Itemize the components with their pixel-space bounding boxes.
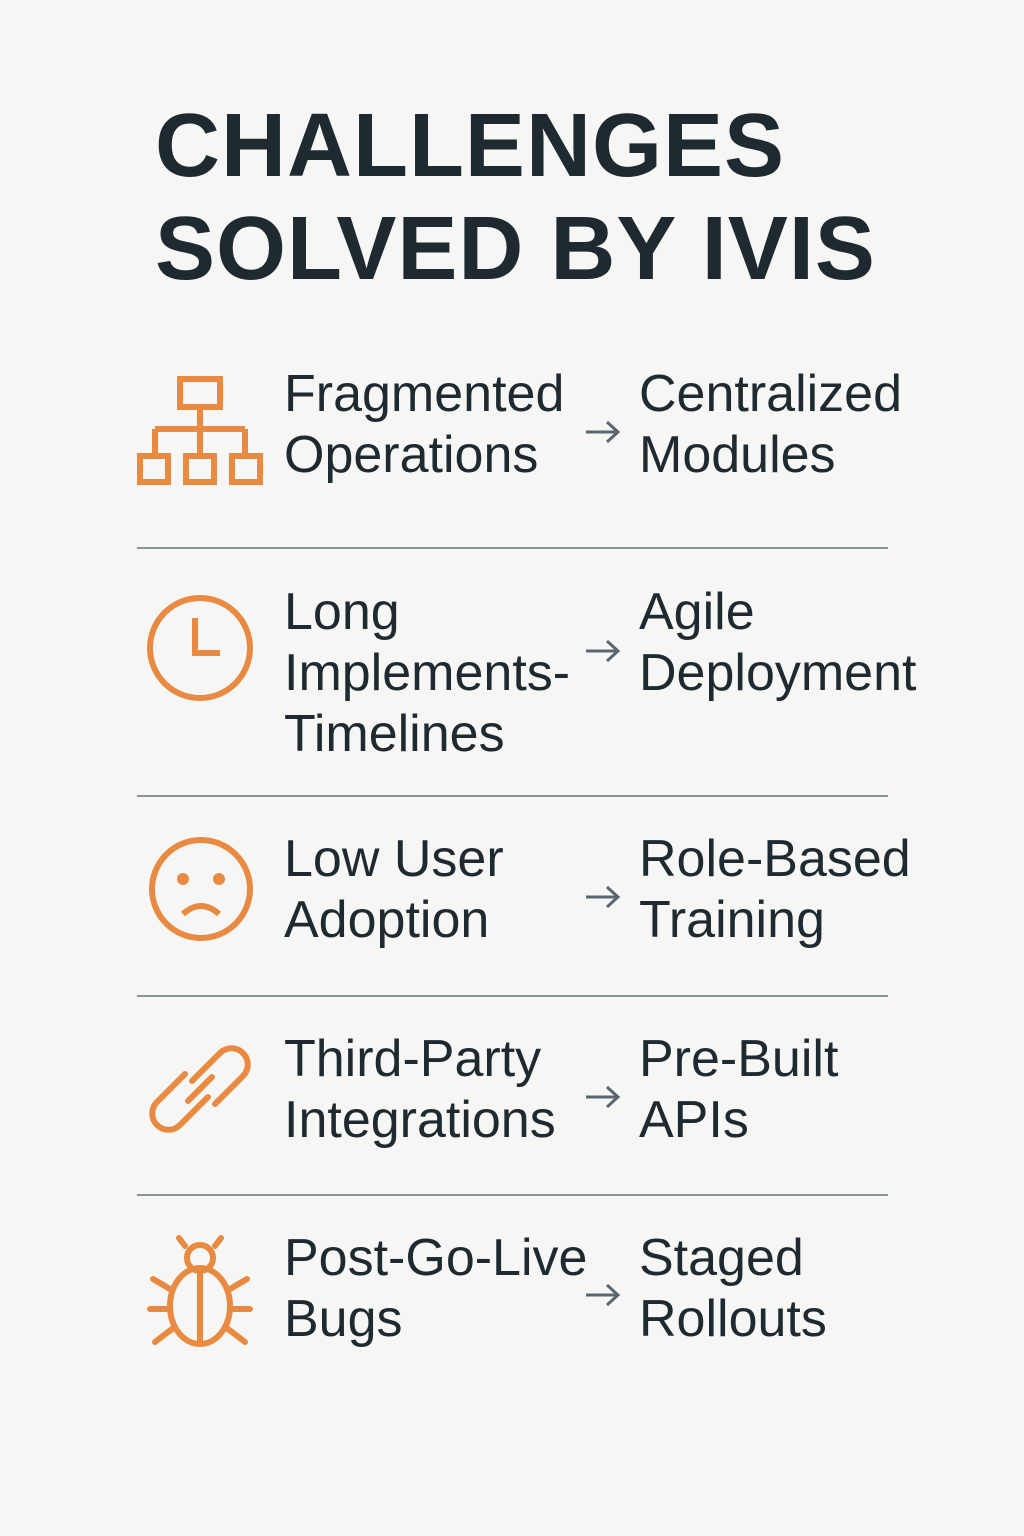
text: solution: Pre-Built bbox=[639, 1030, 838, 1088]
text: solution bbox=[639, 365, 902, 484]
icon: org chart bbox=[137, 376, 263, 485]
icon: clock bbox=[147, 595, 253, 701]
text: problem: Bugs bbox=[284, 1290, 403, 1348]
text: solution: Modules bbox=[639, 426, 836, 484]
arrow bbox=[586, 886, 620, 908]
arrow bbox=[586, 1284, 620, 1306]
text: problem bbox=[284, 830, 504, 949]
text: problem bbox=[284, 365, 564, 484]
row: post-go-live bugs bbox=[147, 1229, 827, 1348]
text: problem: Long bbox=[284, 583, 400, 641]
text: solution: Deployment bbox=[639, 644, 916, 702]
text: solution: Agile bbox=[639, 583, 755, 641]
text: problem: Third-Party bbox=[284, 1030, 541, 1088]
text: solution: Role-Based bbox=[639, 830, 911, 888]
text: problem: Adoption bbox=[284, 891, 489, 949]
text: solution bbox=[639, 1229, 827, 1348]
text: problem bbox=[284, 1030, 556, 1149]
text: problem bbox=[284, 1229, 587, 1348]
row: long timelines bbox=[147, 583, 916, 763]
text: solution: Training bbox=[639, 891, 825, 949]
row: low user adoption bbox=[149, 830, 911, 949]
text: solution: Centralized bbox=[639, 365, 902, 423]
text: solution bbox=[639, 583, 916, 702]
row: fragmented operations bbox=[137, 365, 902, 485]
title: CHALLENGES bbox=[155, 96, 785, 196]
text: problem: Low User bbox=[284, 830, 504, 888]
title: SOLVED BY IVIS bbox=[155, 199, 876, 299]
title bbox=[155, 96, 876, 299]
text: solution: Rollouts bbox=[639, 1290, 827, 1348]
text: solution: Staged bbox=[639, 1229, 804, 1287]
text: problem: Operations bbox=[284, 426, 538, 484]
icon: bug bbox=[147, 1235, 253, 1347]
icon: chain link bbox=[149, 1045, 251, 1133]
arrow bbox=[586, 640, 620, 662]
text: solution bbox=[639, 830, 911, 949]
text: problem: Timelines bbox=[284, 705, 505, 763]
text: solution bbox=[639, 1030, 838, 1149]
text: problem bbox=[284, 583, 570, 763]
row: third-party integrations bbox=[149, 1030, 838, 1149]
arrow bbox=[586, 1086, 620, 1108]
text: problem: Fragmented bbox=[284, 365, 564, 423]
text: solution: APIs bbox=[639, 1091, 749, 1149]
text: problem: Implements- bbox=[284, 644, 570, 702]
arrow bbox=[586, 421, 620, 443]
text: problem: Post-Go-Live bbox=[284, 1229, 587, 1287]
text: problem: Integrations bbox=[284, 1091, 556, 1149]
icon: sad face bbox=[149, 837, 253, 941]
